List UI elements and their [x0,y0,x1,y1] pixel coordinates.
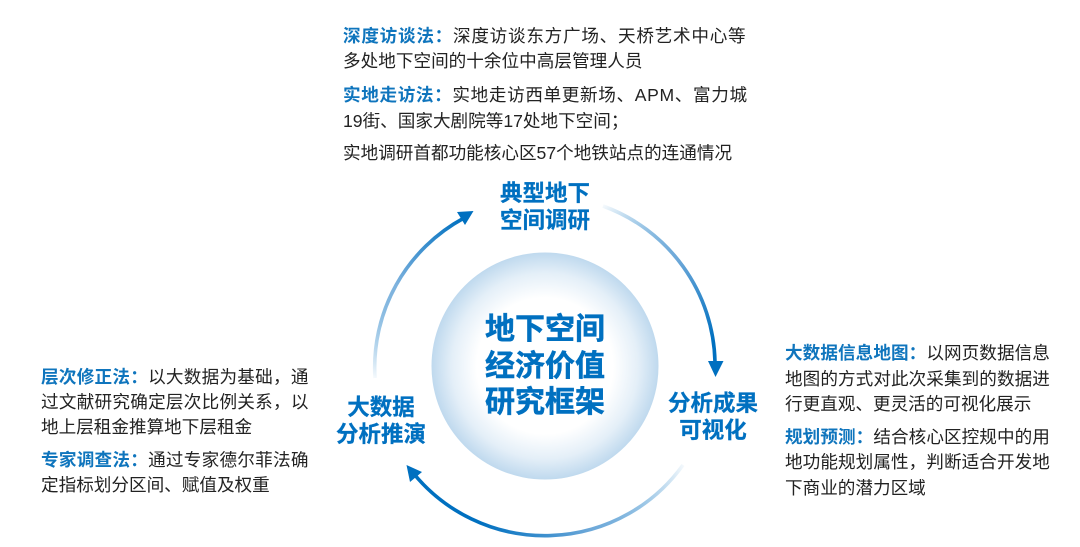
text block: top methods [343,26,748,163]
text block: right methods: 下商业的潜力区域 [785,478,926,498]
text block: right methods: 地功能规划属性，判断适合开发地 [785,452,1050,472]
central orb [432,252,658,480]
central title: 地下空间 [485,313,605,346]
central title [485,312,605,419]
text block: left methods: 定指标划分区间、赋值及权重 [41,475,270,495]
cycle label: survey: 空间调研 [500,208,590,233]
text block: left methods: 层次修正法：以大数据为基础，通 [41,367,309,387]
cycle label: analysis: 分析推演 [336,422,426,447]
cycle label: survey: 典型地下 [500,181,590,206]
text block: top methods: 深度访谈法：深度访谈东方广场、天桥艺术中心等 [343,26,746,46]
text block: left methods: 过文献研究确定层次比例关系，以 [41,392,309,412]
text block: right methods: 行更直观、更灵活的可视化展示 [785,394,1031,414]
text block: left methods: 地上层租金推算地下层租金 [41,417,252,437]
arrow: analysis to survey [375,211,474,378]
text block: right methods: 大数据信息地图：以网页数据信息 [785,343,1050,363]
text block: right methods: 地图的方式对此次采集到的数据进 [785,369,1050,389]
arrow: survey to visualisation [603,206,724,377]
cycle label: analysis [336,395,426,447]
cycle label: visualisation: 可视化 [679,418,747,443]
cycle label: visualisation: 分析成果 [668,391,758,416]
text block: right methods [785,343,1050,498]
arrow: visualisation to analysis [406,465,683,536]
cycle label: analysis: 大数据 [347,395,415,420]
text block: top methods: 多处地下空间的十余位中高层管理人员 [343,51,642,71]
text block: right methods: 规划预测：结合核心区控规中的用 [785,427,1050,447]
text block: top methods: 19街、国家大剧院等17处地下空间； [343,111,628,131]
text block: top methods: 实地调研首都功能核心区57个地铁站点的连通情况 [343,143,732,163]
text block: left methods: 专家调查法：通过专家德尔菲法确 [41,450,309,470]
text block: top methods: 实地走访法：实地走访西单更新场、APM、富力城 [343,85,748,105]
text block: left methods [41,367,309,495]
central title: 研究框架 [485,386,605,419]
cycle label: visualisation [668,391,758,443]
cycle label: survey [500,181,590,233]
central title: 经济价值 [485,350,605,382]
